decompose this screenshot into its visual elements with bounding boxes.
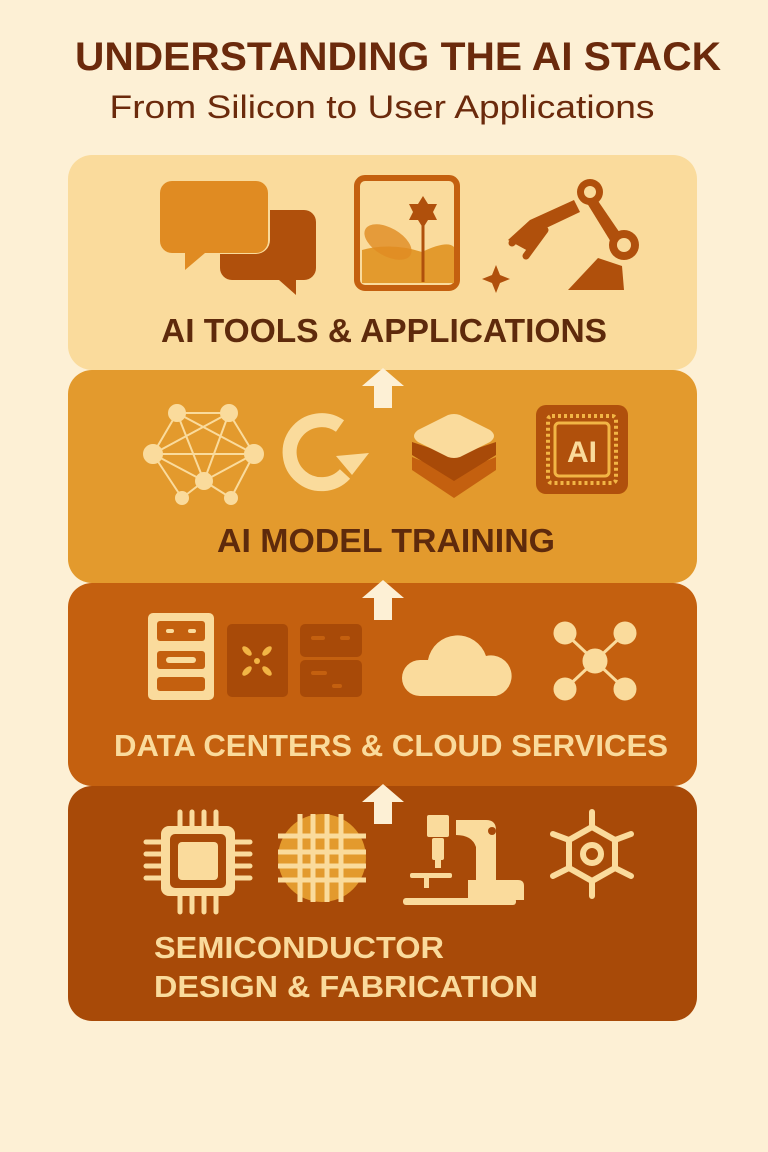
icon: image frame: [357, 178, 457, 288]
panel: data centers & cloud: [68, 583, 697, 786]
panel: semiconductor: [68, 786, 697, 1021]
icon: layers: [412, 414, 496, 498]
label: AI tools: AI TOOLS & APPLICATIONS: [161, 312, 607, 349]
panel: AI model training: [68, 370, 697, 583]
icon: refresh cycle: [290, 420, 369, 484]
icon: cloud: [402, 635, 512, 696]
label: data centers: DATA CENTERS & CLOUD SERVICES: [114, 728, 668, 763]
icon: server rack: [148, 613, 214, 700]
arrow: up 2: [362, 580, 404, 620]
subtitle: From Silicon to User Applications: [110, 89, 654, 125]
label: semiconductor: SEMICONDUCTOR: [154, 930, 444, 965]
label: AI model training: AI MODEL TRAINING: [217, 522, 555, 559]
icon: microchip: [146, 812, 250, 912]
arrow: up 3: [362, 784, 404, 824]
icon: AI chip: [536, 405, 628, 494]
label: semiconductor: [154, 930, 538, 1004]
panel: AI tools & applications: [68, 155, 697, 370]
icon: wafer: [278, 814, 366, 902]
icon: chat bubbles: [160, 181, 316, 295]
icon: fab machine: [403, 815, 524, 905]
icon: hexagon gear: [553, 812, 631, 896]
icon: network hub: [555, 623, 635, 699]
arrow: up 1: [362, 368, 404, 408]
icon: robot arm: [482, 179, 639, 293]
label: semiconductor: DESIGN & FABRICATION: [154, 969, 538, 1004]
icon: server modules: [227, 624, 362, 697]
icon: AI chip: AI: [567, 436, 597, 469]
icon: neural network: [144, 405, 263, 504]
title: UNDERSTANDING THE AI STACK: [75, 35, 721, 79]
